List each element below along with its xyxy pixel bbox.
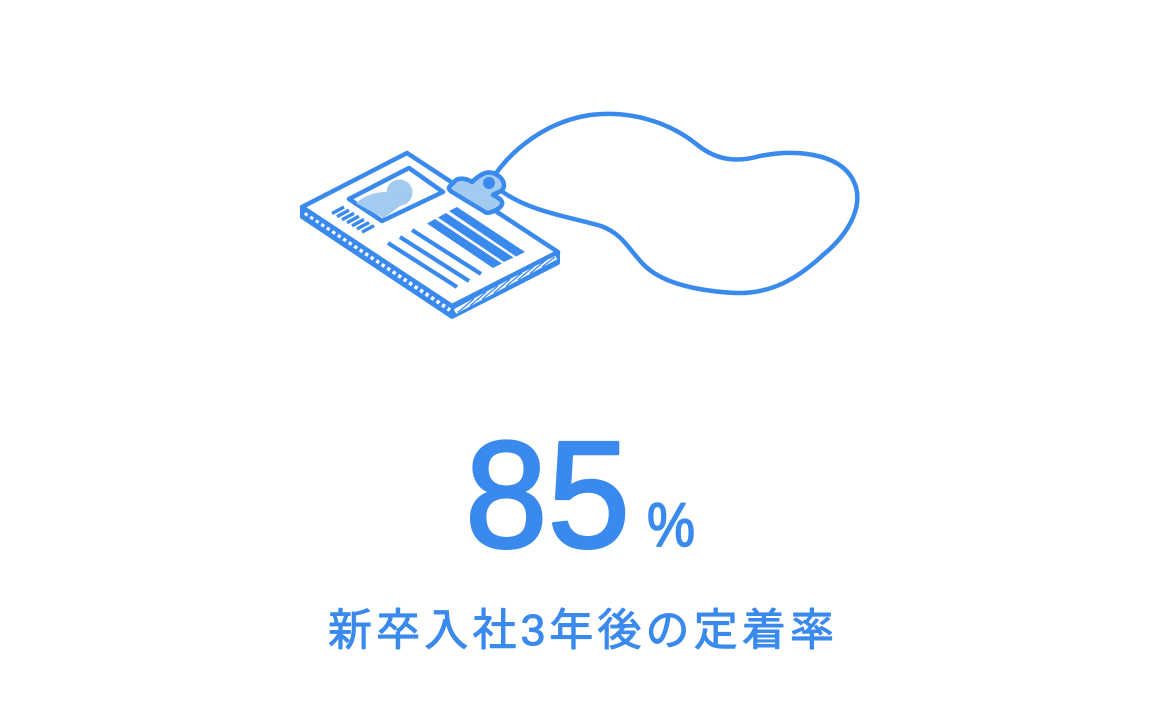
card side edges — [302, 207, 558, 317]
icon: ID card — [302, 153, 558, 317]
icon: badge clip — [449, 172, 504, 213]
thin text lines — [388, 230, 481, 287]
percent sign: % — [647, 491, 695, 560]
caption: 新卒入社3年後の定着率 — [328, 606, 834, 655]
photo frame with portrait — [349, 168, 443, 221]
card top surface — [302, 153, 558, 306]
small text hatch — [332, 207, 374, 232]
icon: lanyard cord — [494, 114, 857, 293]
thick text bars — [427, 207, 525, 268]
big number: 85% — [465, 410, 695, 580]
number 85: 85 — [465, 410, 630, 580]
